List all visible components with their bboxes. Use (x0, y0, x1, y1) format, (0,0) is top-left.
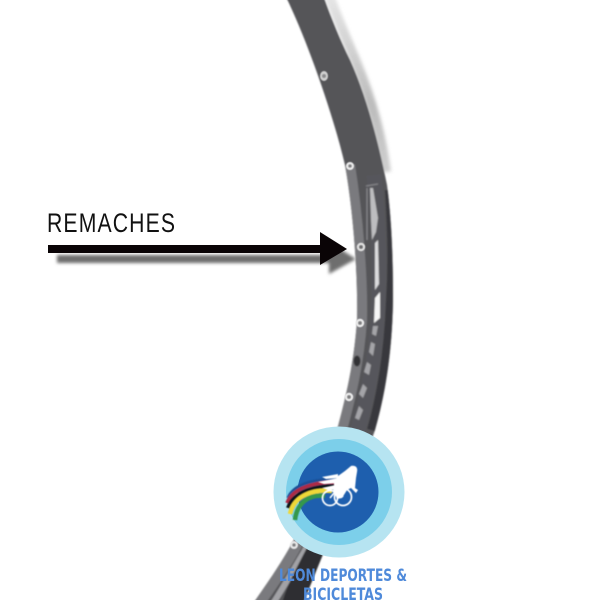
rivet 2 (346, 162, 354, 170)
logo middle ring (286, 439, 392, 545)
rivet 3 (357, 243, 365, 251)
rim decal: frame line (366, 184, 378, 240)
rim decal: middle strip (375, 240, 379, 290)
cyclist bike frame (330, 486, 353, 498)
rivets (290, 71, 365, 549)
rim decal: upper diamond (370, 188, 378, 240)
middle braking surface band (342, 165, 362, 430)
lower rim dark band (282, 548, 324, 600)
rim body (252, 0, 393, 600)
dark right edge (371, 190, 391, 430)
infographic canvas (48, 0, 406, 600)
rivet 4 (356, 319, 364, 327)
cyclist speed streaks (318, 474, 340, 490)
arrow shadow (57, 242, 356, 274)
lower rim left band (256, 540, 302, 600)
icon: rainbow swooshes (287, 479, 340, 520)
lower rim light stripe (270, 546, 307, 600)
bicycle rim (252, 0, 393, 600)
rim decal: lower strip (374, 292, 380, 323)
logo text line 1: LEON DEPORTES & (279, 566, 407, 586)
arrow pointing to rivet (48, 232, 347, 265)
cyclist body (334, 466, 358, 499)
cyclist front wheel (334, 488, 352, 506)
rim decal: lower blocks (355, 326, 378, 420)
icon: cyclist (318, 466, 358, 506)
logo: Leon Deportes y Bicicletas (274, 426, 407, 600)
rivet 1 (320, 71, 328, 81)
middle channel shade (358, 175, 379, 430)
valve hole (354, 356, 360, 366)
rivet 5 (345, 393, 353, 401)
logo inner disc (298, 452, 378, 532)
cyclist rear wheel (322, 490, 338, 506)
rivet 6 (290, 541, 298, 549)
rim pale outer edge (329, 0, 386, 172)
label: REMACHES: REMACHES (47, 209, 175, 239)
logo outer ring (274, 426, 404, 558)
